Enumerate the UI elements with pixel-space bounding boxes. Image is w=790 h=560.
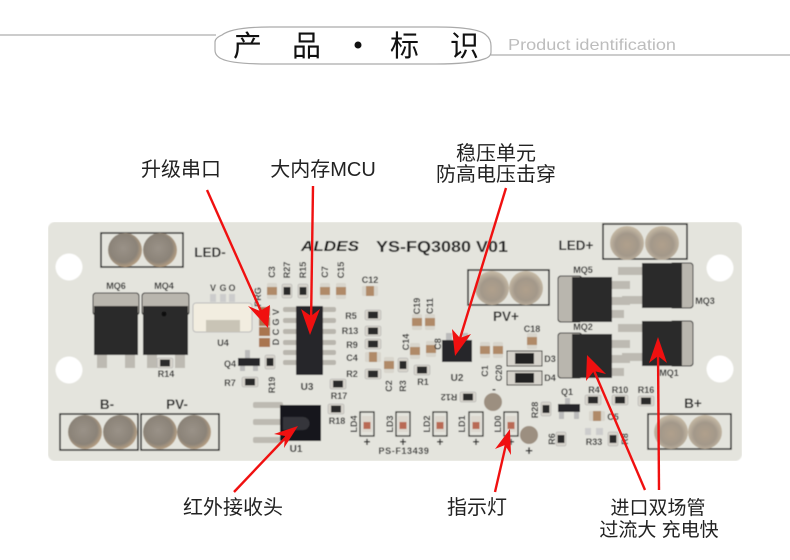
- label: indicator light: 指示灯: [447, 496, 507, 519]
- arrow: upgrade port: [207, 190, 270, 328]
- MOSFET MQ6: [93, 281, 139, 368]
- label: imported dual MOSFET: 过流大 充电快: [599, 519, 719, 541]
- left small components: Q4: [224, 359, 236, 369]
- board pad labels: LED+: [559, 238, 594, 253]
- circuit board: [48, 222, 742, 461]
- arrows: [207, 186, 667, 492]
- title: 标: [390, 30, 419, 63]
- middle components: R3: [398, 380, 408, 392]
- programming pads: V: [271, 309, 281, 315]
- chip U3: [283, 306, 336, 393]
- resistors R17 R18: R18: [329, 416, 345, 426]
- arrow: IR receiver: [234, 426, 298, 492]
- transistor Q1: Q1: [561, 387, 573, 397]
- label: regulator unit: 防高电压击穿: [436, 163, 556, 186]
- pad: B-: [60, 414, 138, 450]
- top row components: R15: [298, 262, 308, 278]
- board pad labels: B-: [100, 397, 114, 412]
- label: regulator unit: [436, 142, 556, 186]
- programming pads: PRG: [253, 287, 263, 307]
- header line left: [0, 34, 216, 36]
- board pad labels: B+: [684, 396, 702, 411]
- board plate: [48, 222, 742, 461]
- top row components: C7: [320, 266, 330, 278]
- MOSFET MQ1: MQ1: [659, 368, 679, 378]
- MOSFET MQ2: [558, 322, 630, 378]
- left small components: R7: [224, 378, 236, 388]
- MOSFET MQ3: MQ3: [695, 296, 715, 306]
- resistor column: C4: [346, 353, 358, 363]
- left small components: [157, 350, 277, 393]
- title capsule: [215, 27, 491, 64]
- top row components: C15: [336, 262, 346, 278]
- board pad labels: LED-: [194, 245, 226, 260]
- lower right components: [530, 385, 654, 447]
- pad: PV-: [141, 414, 219, 450]
- arrow: MCU: [301, 186, 320, 335]
- arrow: regulator: [452, 188, 506, 356]
- receiver U1: [253, 402, 321, 455]
- middle components: C8: [433, 338, 443, 350]
- capacitors C1 C20 C18: C20: [494, 365, 504, 381]
- lower right components: R8: [620, 433, 630, 445]
- indicator LEDs: LD1: [457, 415, 467, 433]
- resistor column: R9: [346, 340, 358, 350]
- resistor column: [342, 310, 381, 379]
- middle components: C19: [412, 298, 422, 314]
- lower right components: R28: [530, 402, 540, 418]
- resistor column: R13: [342, 326, 358, 336]
- regulator U2: [442, 333, 472, 384]
- board pad labels: [100, 238, 702, 412]
- indicator LEDs: LD0: [493, 415, 503, 433]
- title: [233, 30, 479, 63]
- test pads: -: [492, 382, 496, 396]
- middle components: R1: [417, 377, 429, 387]
- pad: B+: [648, 414, 731, 449]
- programming pads: D: [271, 338, 281, 345]
- label: regulator unit: 稳压单元: [456, 142, 536, 165]
- top row components: R27: [282, 262, 292, 278]
- left small components: R19: [267, 377, 277, 393]
- indicator LEDs: [349, 412, 518, 449]
- arrow: MOSFET right: [649, 337, 667, 490]
- resistors R17 R18: R17: [331, 391, 347, 401]
- programming pads: G: [271, 318, 281, 326]
- pad: PV+: [468, 270, 549, 305]
- middle components: C14: [401, 334, 411, 350]
- board pad labels: PV+: [493, 309, 519, 324]
- connector U4: O: [228, 283, 236, 293]
- MOSFET MQ4: [142, 281, 189, 368]
- MOSFET MQ6: MQ6: [106, 281, 126, 291]
- diodes D3 D4: D4: [544, 373, 556, 383]
- board model: YS-FQ3080 V01: [376, 239, 508, 256]
- arrow: indicator: [495, 429, 511, 492]
- connector U4: U4: [217, 338, 229, 348]
- lower right components: R16: [638, 385, 654, 395]
- indicator LEDs: LD2: [422, 415, 432, 433]
- capacitors C1 C20 C18: C1: [480, 365, 490, 377]
- MOSFET MQ1: [618, 321, 693, 378]
- mounting holes: [56, 254, 734, 384]
- top row components: [267, 262, 378, 299]
- resistor column: R2: [346, 369, 358, 379]
- diodes D3 D4: [507, 351, 556, 385]
- capacitors C1 C20 C18: [480, 324, 540, 381]
- transistor Q1: [558, 387, 580, 419]
- resistor column: R5: [345, 311, 357, 321]
- title: 识: [450, 31, 479, 63]
- test pads: +: [525, 443, 533, 458]
- label: large memory MCU: 大内存MCU: [270, 158, 376, 181]
- subtitle: Product identification: [508, 37, 676, 54]
- lower right components: R6: [547, 433, 557, 445]
- connector U4: G: [219, 283, 227, 293]
- label: imported dual MOSFET: 进口双场管: [610, 497, 706, 519]
- MOSFET MQ3: [618, 263, 715, 308]
- MOSFET MQ5: [558, 265, 630, 322]
- header line right: [490, 54, 790, 56]
- resistor R12: [441, 392, 476, 402]
- programming pads: C: [271, 328, 281, 335]
- arrow: MOSFET left: [586, 355, 645, 490]
- connector U4: V: [210, 283, 216, 293]
- logo: ALDES: [300, 238, 359, 255]
- lower right components: R10: [612, 385, 628, 395]
- chip U3: U3: [301, 382, 314, 393]
- MOSFET MQ4: MQ4: [154, 281, 174, 291]
- title: 品: [292, 31, 321, 63]
- programming pads: [253, 287, 281, 347]
- title: 产: [233, 30, 262, 63]
- board part number: PS-F13439: [379, 446, 429, 456]
- pad: LED-: [101, 233, 183, 267]
- lower right components: R4: [588, 385, 600, 395]
- resistor R12: R12: [441, 392, 457, 402]
- test pads: [484, 382, 538, 458]
- board pad labels: PV-: [166, 397, 188, 412]
- regulator U2: U2: [451, 373, 464, 384]
- top row components: C12: [362, 275, 378, 285]
- lower right components: R33: [586, 437, 602, 447]
- MOSFET MQ2: MQ2: [573, 322, 593, 332]
- capacitors C1 C20 C18: C18: [524, 324, 540, 334]
- diodes D3 D4: D3: [544, 354, 556, 364]
- label: infrared receiver: 红外接收头: [183, 496, 283, 519]
- lower right components: C5: [607, 412, 619, 422]
- top row components: C3: [267, 266, 277, 278]
- indicator LEDs: LD4: [349, 415, 359, 433]
- connector U4: [193, 283, 252, 348]
- label: imported dual MOSFET: [599, 497, 719, 541]
- middle components: [384, 298, 443, 392]
- indicator LEDs: LD3: [385, 415, 395, 433]
- MOSFET MQ5: MQ5: [573, 265, 593, 275]
- receiver U1: U1: [290, 444, 303, 455]
- left small components: R14: [158, 369, 174, 379]
- middle components: C11: [425, 298, 435, 314]
- middle components: C2: [384, 380, 394, 392]
- resistors R17 R18: [328, 379, 347, 426]
- label: upgrade port: 升级串口: [141, 158, 221, 181]
- pad: LED+: [603, 224, 687, 260]
